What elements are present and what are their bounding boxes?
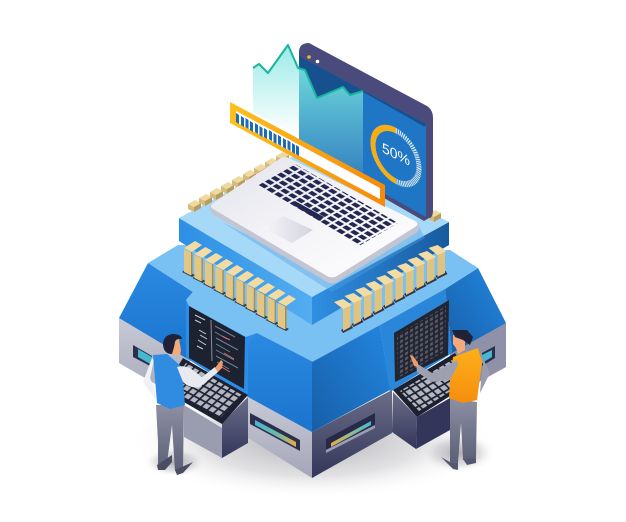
blue vest bbox=[153, 354, 185, 409]
server base bbox=[119, 245, 506, 478]
right wing blue face bbox=[445, 268, 506, 353]
back connector pins bbox=[188, 152, 441, 222]
top tier surface bbox=[179, 150, 449, 297]
center dark face bbox=[312, 390, 392, 478]
front arm bbox=[177, 366, 218, 387]
bar frame bbox=[230, 102, 385, 207]
window dots bbox=[307, 55, 319, 63]
window header bbox=[299, 56, 426, 127]
laptop bbox=[210, 157, 419, 284]
back arm bbox=[143, 358, 156, 400]
face bbox=[172, 339, 181, 356]
progress bar bbox=[230, 102, 385, 207]
left console bbox=[163, 358, 248, 458]
left wing grey side bbox=[119, 318, 190, 404]
top tier block bbox=[179, 150, 449, 325]
back arm bbox=[480, 352, 490, 393]
person: right technician bbox=[410, 330, 490, 470]
laptop deck bbox=[211, 157, 418, 278]
bar interior bbox=[236, 111, 380, 199]
right console bbox=[392, 353, 472, 449]
floor shadow bbox=[127, 380, 497, 500]
progress segments bbox=[236, 113, 299, 156]
face bbox=[453, 335, 465, 354]
screen display bbox=[299, 56, 426, 217]
shoes bbox=[157, 455, 193, 475]
right wing slot bbox=[482, 346, 495, 366]
center left blue face bbox=[248, 333, 313, 432]
left screen housing bbox=[186, 300, 257, 397]
left code screen bbox=[189, 306, 245, 389]
left keyboard bbox=[163, 358, 248, 424]
person: left technician bbox=[143, 334, 223, 475]
left wing slot bbox=[133, 345, 152, 367]
right screen housing bbox=[380, 289, 452, 392]
gauge label: 50% bbox=[382, 141, 410, 170]
screen frame bbox=[299, 43, 433, 221]
center grey face bbox=[248, 397, 312, 478]
touchpad bbox=[262, 216, 313, 243]
top tier right face bbox=[312, 222, 449, 325]
left connector pins bbox=[182, 241, 296, 331]
right keyboard bbox=[393, 353, 472, 417]
tablet screen bbox=[299, 43, 433, 221]
hair bbox=[163, 334, 182, 354]
laptop base edge bbox=[210, 205, 419, 284]
trousers bbox=[156, 405, 184, 471]
center right slot bbox=[326, 413, 375, 453]
middle tier top surface bbox=[148, 245, 478, 362]
hand bbox=[410, 355, 418, 367]
left housing top strip bbox=[186, 300, 257, 337]
front arm bbox=[416, 360, 458, 382]
50% gauge bbox=[373, 119, 419, 193]
keyboard bbox=[257, 164, 398, 246]
shoes bbox=[441, 457, 476, 470]
hand bbox=[215, 360, 223, 372]
center right blue face bbox=[312, 325, 390, 432]
left wing blue face bbox=[119, 263, 193, 358]
top tier left face bbox=[179, 218, 312, 325]
laptop cast shadow bbox=[222, 222, 425, 292]
center left slot bbox=[250, 413, 300, 451]
space bar bbox=[290, 201, 324, 221]
trousers bbox=[450, 398, 477, 463]
orange vest bbox=[449, 348, 482, 403]
gauge ring bbox=[373, 119, 419, 193]
right dot-matrix screen bbox=[394, 300, 449, 382]
right connector pins bbox=[334, 245, 448, 333]
area chart bbox=[253, 45, 363, 175]
hair bbox=[452, 330, 473, 345]
right wing grey side bbox=[450, 323, 506, 398]
